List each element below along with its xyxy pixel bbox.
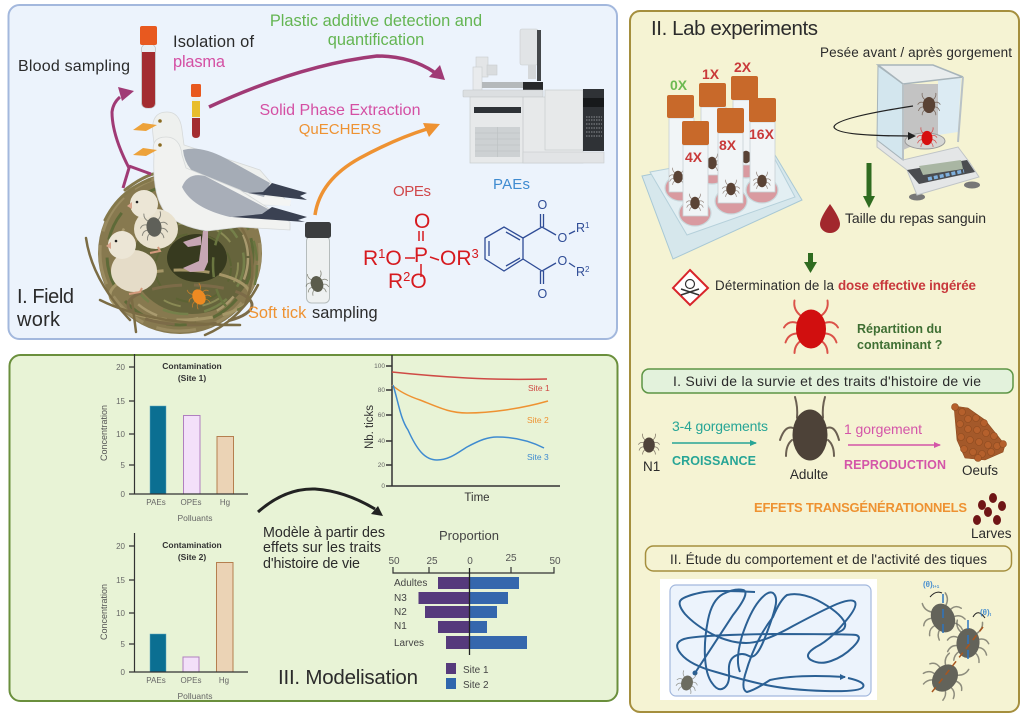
chemical structure: PAE: O [558, 231, 568, 245]
line chart: Nb. ticks over time: Site 2 [527, 415, 549, 425]
bar chart: Contamination site 1: Polluants [178, 513, 212, 523]
chemical structure: OPE [363, 210, 479, 293]
box: II. Étude du comportement [646, 546, 1012, 571]
arrow: balance to blood meal [863, 163, 875, 208]
label: Soft tick sampling: sampling [312, 304, 378, 322]
label: Plastic additive detection and quantification: quantification [328, 31, 424, 49]
text: Répartition du contaminant: contaminant ? [857, 338, 942, 352]
population pyramid: Proportion: N2 [394, 607, 407, 618]
line chart: Nb. ticks over time: Site 3 [527, 452, 549, 462]
arrow: to ingested dose [804, 253, 817, 273]
icon: tray with dose tubes: 1X [702, 66, 720, 82]
bar chart: Contamination site 2: 0 [121, 668, 126, 677]
label: Taille du repas sanguin: Taille du repas sanguin [845, 210, 986, 226]
label: Solid Phase Extraction: Solid Phase Extraction [260, 102, 420, 119]
population pyramid: Proportion: 0 [467, 556, 473, 567]
chemical structure: PAE [485, 198, 590, 301]
label: 1 gorgement: 1 gorgement [844, 421, 922, 437]
bar chart: Contamination site 2: (Site 2) [178, 552, 206, 562]
text: dose determination: Détermination de la [715, 278, 835, 293]
chemical structure: OPE: O [410, 270, 427, 293]
icon: egg cluster [952, 404, 1006, 462]
icon: chicks [106, 190, 178, 294]
chemical structure: PAE: R [576, 221, 585, 235]
bar chart: Contamination site 1: (Site 1) [178, 373, 206, 383]
line chart: Nb. ticks over time: Time [464, 492, 490, 504]
population pyramid: Proportion: 25 [426, 556, 438, 567]
panel: II. Lab experiments [630, 11, 1019, 712]
legend: Site 1 [463, 665, 489, 676]
icon: tray with dose tubes [642, 59, 802, 259]
population pyramid: Proportion: N1 [394, 621, 407, 632]
text: Répartition du contaminant: Répartition du [857, 322, 942, 336]
arrow: contamination to model [258, 489, 383, 516]
icon: vial with tick [303, 222, 331, 303]
box: I. Suivi de la survie [642, 369, 1013, 393]
legend [446, 663, 489, 691]
label: Isolation of plasma: plasma [173, 53, 226, 71]
icon: tick on chick [139, 211, 169, 241]
label: Blood sampling: Blood sampling [18, 58, 130, 75]
bar chart: Contamination site 2: 5 [121, 640, 126, 649]
bar chart: Contamination site 2: Hg [219, 676, 229, 685]
icon: orange tick in nest [183, 281, 214, 311]
chemical structure: OPE: R [363, 247, 378, 270]
icon: plasma tube [191, 84, 201, 138]
bar chart: Contamination site 2: 20 [116, 542, 126, 551]
tick movement angles [915, 580, 992, 705]
line chart: Nb. ticks over time: 0 [381, 483, 385, 490]
label: N1: N1 [643, 459, 660, 474]
icon: tray with dose tubes: 2X [734, 59, 752, 75]
bar chart: Contamination site 2: 10 [116, 609, 126, 618]
chemical structure: PAE: R [576, 265, 585, 279]
icon: red tick [784, 300, 838, 353]
label: 3-4 gorgements: 3-4 gorgements [672, 418, 768, 434]
icon: front gull [133, 137, 307, 272]
population pyramid: Proportion: 50 [549, 556, 561, 567]
text: model description: effets sur les traits [263, 540, 381, 556]
chemical structure: PAE: 2 [585, 265, 590, 274]
population pyramid: Proportion [388, 528, 561, 691]
label: Larves: Larves [971, 526, 1012, 541]
chemical structure: OPE: 1 [378, 246, 385, 261]
nest with twigs [86, 172, 262, 335]
heading: III. Modelisation: III. Modelisation [278, 666, 418, 689]
panel: III. Modelisation [10, 354, 618, 701]
label: Oeufs: Oeufs [962, 463, 998, 478]
icon: N1 tick [639, 434, 659, 454]
label: CROISSANCE: CROISSANCE [672, 454, 756, 468]
line chart: Nb. ticks over time: 100 [374, 363, 385, 370]
movement tracking arena [660, 579, 877, 700]
icon: larvae [973, 493, 1006, 525]
label: Soft tick sampling: Soft tick [248, 304, 307, 322]
chemical structure: PAE: 1 [585, 221, 590, 230]
tick movement angles: t+1 [933, 584, 940, 589]
legend: Site 2 [463, 680, 489, 691]
line chart: Nb. ticks over time: 20 [378, 462, 385, 469]
population pyramid: Proportion: 50 [388, 556, 400, 567]
bar chart: Contamination site 1: 15 [116, 397, 126, 406]
label: Plastic additive detection and quantification: Plastic additive detection and [270, 12, 482, 30]
icon: tray with dose tubes: 16X [749, 126, 775, 142]
label: Isolation of plasma: Isolation of [173, 33, 254, 51]
arrow: plasma to instrument [209, 56, 445, 107]
icon: analytical instrument [463, 29, 604, 163]
line chart: Nb. ticks over time: 40 [378, 438, 385, 445]
icon: tray with dose tubes: 0X [670, 77, 688, 93]
bar chart: Contamination site 1: 20 [116, 363, 126, 372]
line chart: Nb. ticks over time: Site 1 [528, 383, 550, 393]
label: Adulte: Adulte [790, 467, 828, 482]
bar chart: Contamination site 2: Polluants [178, 691, 212, 701]
bar chart: Contamination site 1: Hg [220, 498, 230, 507]
arrow: tick vial to instrument [315, 123, 440, 215]
bar chart: Contamination site 2: Concentration [99, 584, 109, 640]
population pyramid: Proportion: 25 [505, 553, 517, 564]
chemical structure: OPE: O [414, 210, 430, 233]
chemical structure: OPE: 3 [472, 246, 479, 261]
text: dose determination: dose effective ingérée [838, 278, 976, 293]
line chart: Nb. ticks over time: 80 [378, 387, 385, 394]
icon: hazard diamond [673, 270, 708, 305]
icon: tray with dose tubes: 4X [685, 149, 703, 165]
tick movement angles: (θ) [980, 608, 990, 617]
chemical structure: PAE: O [558, 254, 568, 268]
bar chart: Contamination site 1: 0 [121, 490, 126, 499]
label: OPEs: OPEs [393, 183, 431, 200]
population pyramid: Proportion: Proportion [439, 528, 499, 543]
icon: adult tick [780, 397, 839, 460]
heading: I. Field work: work [16, 309, 61, 331]
heading: I. Field work: I. Field [17, 286, 74, 308]
bar chart: Contamination site 1: 5 [121, 461, 126, 470]
label: PAEs: PAEs [493, 176, 530, 193]
population pyramid: Proportion: Larves [394, 638, 424, 649]
box: I. Suivi de la survie: I. Suivi de la survie et des traits d'histoire de vie [673, 373, 981, 389]
icon: tray with dose tubes: 8X [719, 137, 737, 153]
label: REPRODUCTION: REPRODUCTION [844, 458, 946, 472]
heading: II. Lab experiments: II. Lab experiments [651, 17, 818, 40]
chemical structure: OPE: R [388, 270, 403, 293]
bar chart: Contamination site 1: OPEs [181, 498, 201, 507]
chemical structure: OPE: 2 [403, 269, 410, 284]
bar chart: Contamination site 1: 10 [116, 430, 126, 439]
tick movement angles: (θ) [923, 580, 933, 589]
arrow: birds to blood sampling [112, 87, 151, 188]
line chart: Nb. ticks over time: Nb. ticks [364, 405, 376, 449]
text: model description: d'histoire de vie [263, 556, 360, 572]
arrow: growth [672, 442, 756, 444]
bar chart: Contamination site 2: 15 [116, 576, 126, 585]
icon: back gull [133, 112, 307, 206]
label: Effets transgénérationnels: EFFETS TRANSGÉNÉRATIONNELS [754, 500, 967, 515]
population pyramid: Proportion: N3 [394, 593, 407, 604]
icon: precision balance [834, 65, 980, 200]
icon: blood tube [140, 26, 157, 108]
text: model description: Modèle à partir des [263, 525, 385, 541]
chemical structure: OPE: O [385, 247, 402, 270]
line chart: Nb. ticks over time: 60 [378, 412, 385, 419]
tick movement angles: t [990, 612, 992, 617]
bar chart: Contamination site 2: OPEs [181, 676, 201, 685]
panel: I. Field work [8, 5, 617, 339]
bar chart: Contamination site 2 [99, 533, 248, 701]
chemical structure: OPE: P [414, 244, 428, 267]
bar chart: Contamination site 1: Concentration [99, 405, 109, 461]
chemical structure: PAE: O [538, 287, 548, 301]
bar chart: Contamination site 2: PAEs [146, 676, 166, 685]
bar chart: Contamination site 1: PAEs [146, 498, 166, 507]
population pyramid: Proportion: Adultes [394, 578, 427, 589]
bar chart: Contamination site 1 [99, 354, 248, 523]
bar chart: Contamination site 2: Contamination [162, 540, 222, 550]
arrow: reproduction [848, 444, 940, 446]
chemical structure: OPE: OR [440, 247, 472, 270]
label: QuECHERS: QuECHERS [299, 121, 381, 138]
icon: blood drop [820, 204, 840, 233]
line chart: Nb. ticks over time [364, 355, 560, 504]
label: Pesée avant / après gorgement: Pesée avant / après gorgement [820, 45, 1012, 60]
bar chart: Contamination site 1: Contamination [162, 361, 222, 371]
box: II. Étude du comportement: II. Étude du comportement et de l'activité des tiques [670, 552, 987, 567]
chemical structure: PAE: O [538, 198, 548, 212]
